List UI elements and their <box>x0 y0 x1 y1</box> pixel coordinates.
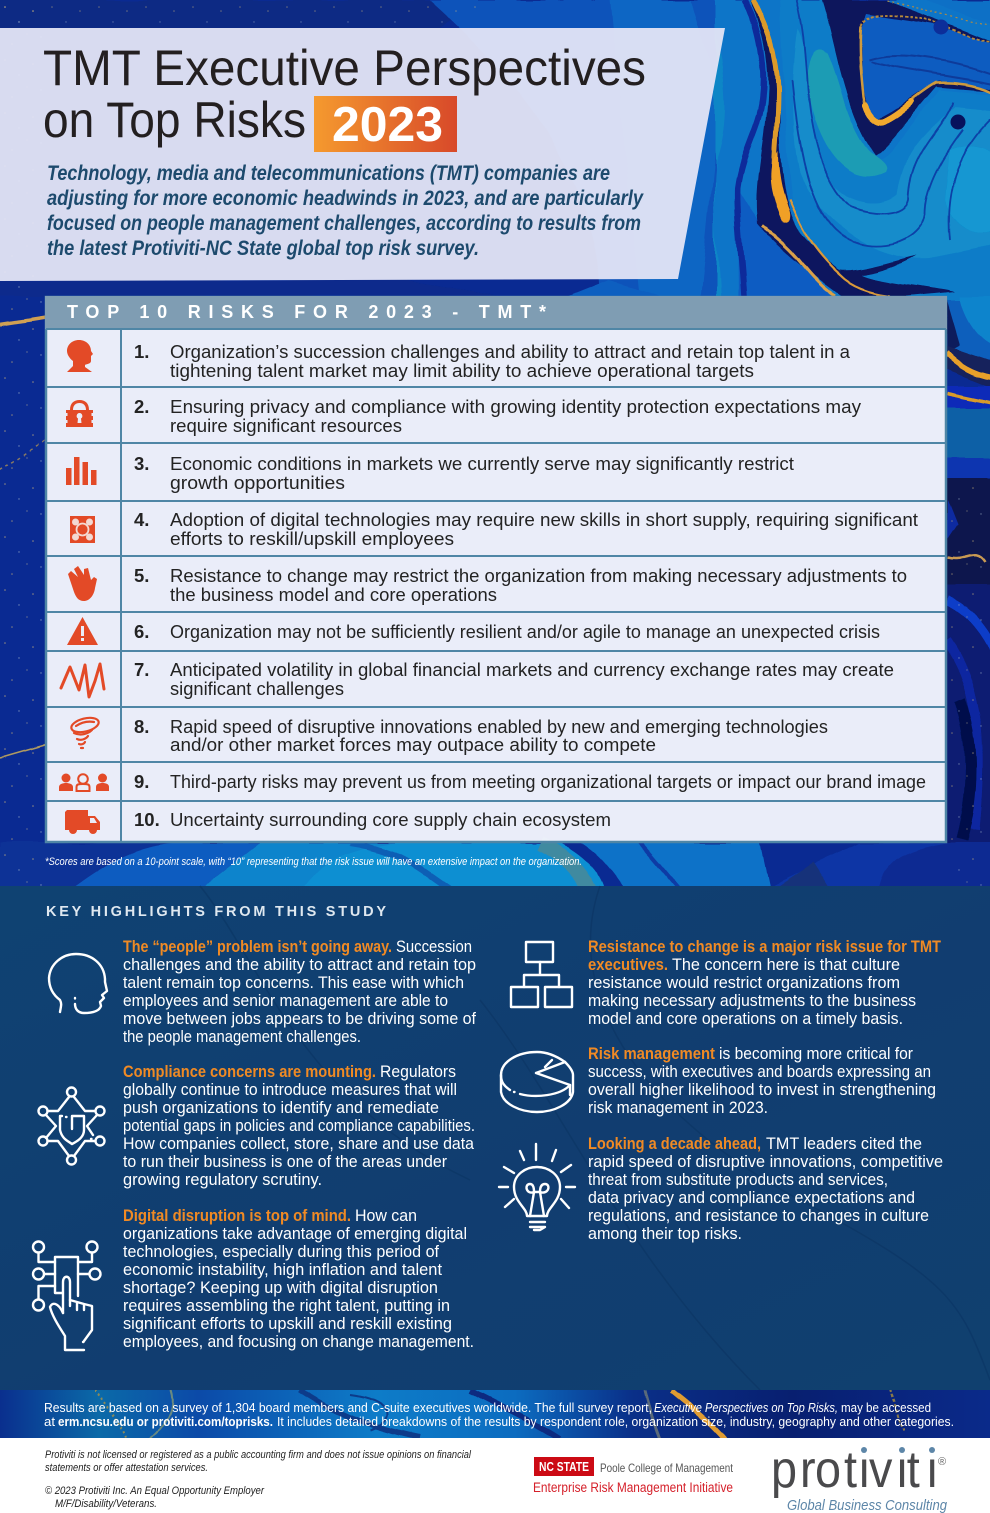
panel: survey note band: Executive Perspectives on Top Risks, <box>654 1400 838 1415</box>
icon: connected nodes square <box>70 516 95 543</box>
highlight: looking a decade ahead: rapid speed of disruptive innovations, competitive <box>588 1153 943 1171</box>
table header: TOP 10 RISKS FOR 2023 - TMT* <box>67 302 546 322</box>
subtitle text <box>47 162 644 260</box>
lower-left blue below gold <box>738 194 830 296</box>
risk 8: Rapid speed of disruptive innovations enabled by new and emerging technologies <box>170 716 828 737</box>
risk 5: the business model and core operations <box>170 584 497 605</box>
navy streak bottom right <box>840 255 955 300</box>
gold streaks <box>753 0 778 180</box>
highlight: compliance: Regulators <box>380 1063 456 1081</box>
risk 9: 9. <box>134 771 149 792</box>
right strip beside table <box>947 300 990 360</box>
highlight: compliance: growing regulatory scrutiny. <box>123 1171 322 1189</box>
icon: warning triangle <box>67 617 98 645</box>
navy under gold <box>750 0 865 296</box>
highlight: resistance to change: Resistance to change is a major risk issue for TMT <box>588 938 941 956</box>
footer legal text: © 2023 Protiviti Inc. An Equal Opportunity Employer <box>45 1485 264 1497</box>
risk 9: Third-party risks may prevent us from meeting organizational targets or impact our brand image <box>170 771 926 792</box>
highlight: digital disruption: requires assembling the right talent, putting in <box>123 1297 450 1315</box>
highlight: digital disruption: significant efforts to upskill and reskill existing <box>123 1315 452 1333</box>
risk 4: 4. <box>134 509 149 530</box>
highlight: risk management: risk management in 2023. <box>588 1099 768 1117</box>
highlight: looking a decade ahead: threat from substitute products and services, <box>588 1171 888 1189</box>
highlight: compliance: Compliance concerns are mounting. <box>123 1063 376 1081</box>
risk 2 <box>66 396 862 436</box>
risk 2: require significant resources <box>170 415 402 436</box>
highlight: compliance: to run their business is one of the areas under <box>123 1153 448 1171</box>
lower band above table <box>0 280 500 296</box>
highlight: compliance <box>38 1063 475 1189</box>
risk 8 <box>70 715 828 755</box>
highlight: people problem <box>49 938 476 1046</box>
highlight: digital disruption: shortage? Keeping up with digital disruption <box>123 1279 438 1297</box>
highlight: looking a decade ahead: TMT leaders cited the <box>766 1135 922 1153</box>
logo: NC State: Poole College of Management <box>600 1461 734 1475</box>
footer legal text <box>45 1449 472 1510</box>
panel: title backdrop <box>0 28 725 281</box>
panel: survey note band: erm.ncsu.edu or protiviti.com/toprisks. <box>58 1414 273 1429</box>
footer legal text: Protiviti is not licensed or registered as a public accounting firm and does not issue opinions on financial <box>45 1449 472 1461</box>
subtitle text: adjusting for more economic headwinds in 2023, and are particularly <box>47 187 644 210</box>
highlight: resistance to change: resistance would restrict organizations from <box>588 974 900 992</box>
navy wedge <box>822 0 990 155</box>
highlight: digital disruption: Digital disruption is top of mind. <box>123 1207 351 1225</box>
subtitle text: focused on people management challenges, according to results from <box>47 212 641 235</box>
top right blue <box>925 0 990 24</box>
highlight: resistance to change: model and core operations on a timely basis. <box>588 1010 903 1028</box>
icon: head silhouette <box>67 340 93 372</box>
risk 1: Organization’s succession challenges and ability to attract and retain top talent in a <box>170 341 851 362</box>
highlight: risk management <box>501 1045 936 1117</box>
icon: sheriff star shield <box>38 1088 104 1164</box>
highlight: digital disruption <box>33 1207 474 1351</box>
swirl contours <box>792 0 990 246</box>
highlight: people problem: Succession <box>396 938 472 956</box>
risk 7: 7. <box>134 659 149 680</box>
risk 3: Economic conditions in markets we currently serve may significantly restrict <box>170 453 794 474</box>
table header <box>45 296 947 329</box>
highlight: resistance to change: The concern here is that culture <box>672 956 900 974</box>
panel: key highlights section <box>0 886 990 1390</box>
highlight: people problem: the people management challenges. <box>123 1028 361 1046</box>
highlight: looking a decade ahead: among their top risks. <box>588 1225 742 1243</box>
title: TMT Executive Perspectives <box>43 40 646 96</box>
risk 7 <box>61 659 894 699</box>
icon: delivery truck <box>65 810 100 834</box>
risk 1 <box>67 340 851 381</box>
risk 10 <box>65 809 611 834</box>
icon: head outline <box>49 954 107 1013</box>
risk 2: 2. <box>134 396 149 417</box>
highlight: compliance: push organizations to identify and remediate <box>123 1099 439 1117</box>
highlight: risk management: is becoming more critical for <box>719 1045 914 1063</box>
highlight: people problem: challenges and the ability to attract and retain top <box>123 956 476 974</box>
highlight: risk management: overall higher likelihood to invest in strengthening <box>588 1081 936 1099</box>
icon: padlock <box>66 400 93 427</box>
highlight: resistance to change: making necessary adjustments to the business <box>588 992 916 1010</box>
risk 7: Anticipated volatility in global financial markets and currency exchange rates may create <box>170 659 894 680</box>
strip below table <box>90 846 157 876</box>
highlight: compliance: globally continue to introduce measures that will <box>123 1081 457 1099</box>
icon: volatility zigzag <box>61 664 104 697</box>
panel: survey note band: It includes detailed breakdowns of the results by respondent role, organization size, industry, geography and other categories. <box>277 1414 954 1429</box>
panel: white footer <box>0 1438 990 1513</box>
logo: NC State <box>533 1457 734 1495</box>
panel: top 10 risks table <box>45 296 947 842</box>
highlight: people problem: move between jobs appears to be driving some of <box>123 1010 476 1028</box>
risk 2: Ensuring privacy and compliance with growing identity protection expectations may <box>170 396 862 417</box>
icon: raised hand <box>68 566 97 601</box>
logo: Protiviti: protiviti <box>771 1441 937 1499</box>
highlight: resistance to change <box>511 938 941 1028</box>
risk 6: Organization may not be sufficiently resilient and/or agile to manage an unexpected crisis <box>170 621 880 642</box>
navy left edge band <box>737 0 763 300</box>
highlight: people problem: employees and senior management are able to <box>123 992 448 1010</box>
highlight: people problem: talent remain top concerns. This ease with which <box>123 974 464 992</box>
panel: survey note band: may be accessed <box>841 1400 931 1415</box>
panel: survey note band: at <box>44 1414 55 1429</box>
risk 5: 5. <box>134 565 149 586</box>
risk 3: 3. <box>134 453 149 474</box>
risk 10: 10. <box>134 809 160 830</box>
risk 3: growth opportunities <box>170 472 345 493</box>
icon: org chart <box>511 942 572 1007</box>
logo: NC State: NC STATE <box>539 1460 589 1474</box>
heading: key highlights: KEY HIGHLIGHTS FROM THIS STUDY <box>46 904 386 920</box>
highlight: people problem: The “people” problem isn’t going away. <box>123 938 392 956</box>
blue block <box>860 13 990 118</box>
highlight: looking a decade ahead: Looking a decade ahead, <box>588 1135 761 1153</box>
title: on Top Risks <box>43 92 306 148</box>
highlight: risk management: success, with executives and boards expressing an <box>588 1063 931 1081</box>
icon: pie chart <box>501 1052 573 1112</box>
risk 4: Adoption of digital technologies may require new skills in short supply, requiring significant <box>170 509 918 530</box>
risk 5: Resistance to change may restrict the organization from making necessary adjustments to <box>170 565 907 586</box>
risk 5 <box>68 565 907 605</box>
highlight: digital disruption: employees, and focusing on change management. <box>123 1333 474 1351</box>
panel: survey note band: Results are based on a survey of 1,304 board members and C-suite executives worldwide. The full survey report, <box>44 1400 652 1415</box>
icon: tornado <box>70 715 100 748</box>
icon: light bulb <box>499 1144 575 1230</box>
risk 6: 6. <box>134 621 149 642</box>
background: marbled blue and gold paint <box>0 0 990 890</box>
highlight: digital disruption: economic instability, high inflation and talent <box>123 1261 442 1279</box>
risk 3 <box>66 453 794 493</box>
risk 8: 8. <box>134 716 149 737</box>
risk 6 <box>67 617 880 645</box>
logo: NC State: Enterprise Risk Management Initiative <box>533 1480 733 1495</box>
risk 8: and/or other market forces may outpace ability to compete <box>170 734 656 755</box>
subtitle text: Technology, media and telecommunications (TMT) companies are <box>47 162 610 185</box>
highlight: compliance: potential gaps in policies and compliance capabilities. <box>123 1117 475 1135</box>
speckles <box>4 6 42 886</box>
footnote: *Scores are based on a 10-point scale, with “10” representing that the risk issue will have an extensive impact on the organization. <box>45 856 582 868</box>
title <box>43 40 646 148</box>
highlight: digital disruption: organizations take advantage of emerging digital <box>123 1225 467 1243</box>
icon: three people <box>59 774 109 791</box>
highlight: resistance to change: executives. <box>588 956 668 974</box>
risk 7: significant challenges <box>170 678 344 699</box>
highlight: risk management: Risk management <box>588 1045 715 1063</box>
panel: survey note band <box>0 1390 990 1438</box>
risk 4 <box>70 509 918 549</box>
year badge: 2023 <box>332 98 443 152</box>
risk 1: tightening talent market may limit ability to achieve operational targets <box>170 360 754 381</box>
swirl to the right of the gold streak <box>792 6 950 295</box>
highlight: looking a decade ahead: data privacy and compliance expectations and <box>588 1189 915 1207</box>
highlight: looking a decade ahead: regulations, and resistance to changes in culture <box>588 1207 929 1225</box>
subtitle text: the latest Protiviti-NC State global top risk survey. <box>47 237 479 260</box>
highlight: digital disruption: technologies, especially during this period of <box>123 1243 439 1261</box>
icon: touch circuit <box>33 1242 100 1350</box>
highlight: digital disruption: How can <box>355 1207 417 1225</box>
logo: Protiviti: ® <box>938 1456 946 1468</box>
highlight: looking a decade ahead <box>499 1135 943 1243</box>
risk 10: Uncertainty surrounding core supply chain ecosystem <box>170 809 611 830</box>
footer legal text: statements or offer attestation services. <box>45 1462 208 1474</box>
highlight: compliance: How companies collect, store, share and use data <box>123 1135 475 1153</box>
footer legal text: M/F/Disability/Veterans. <box>55 1498 157 1510</box>
icon: bar chart <box>66 457 96 485</box>
risk 1: 1. <box>134 341 149 362</box>
risk 4: efforts to reskill/upskill employees <box>170 528 454 549</box>
